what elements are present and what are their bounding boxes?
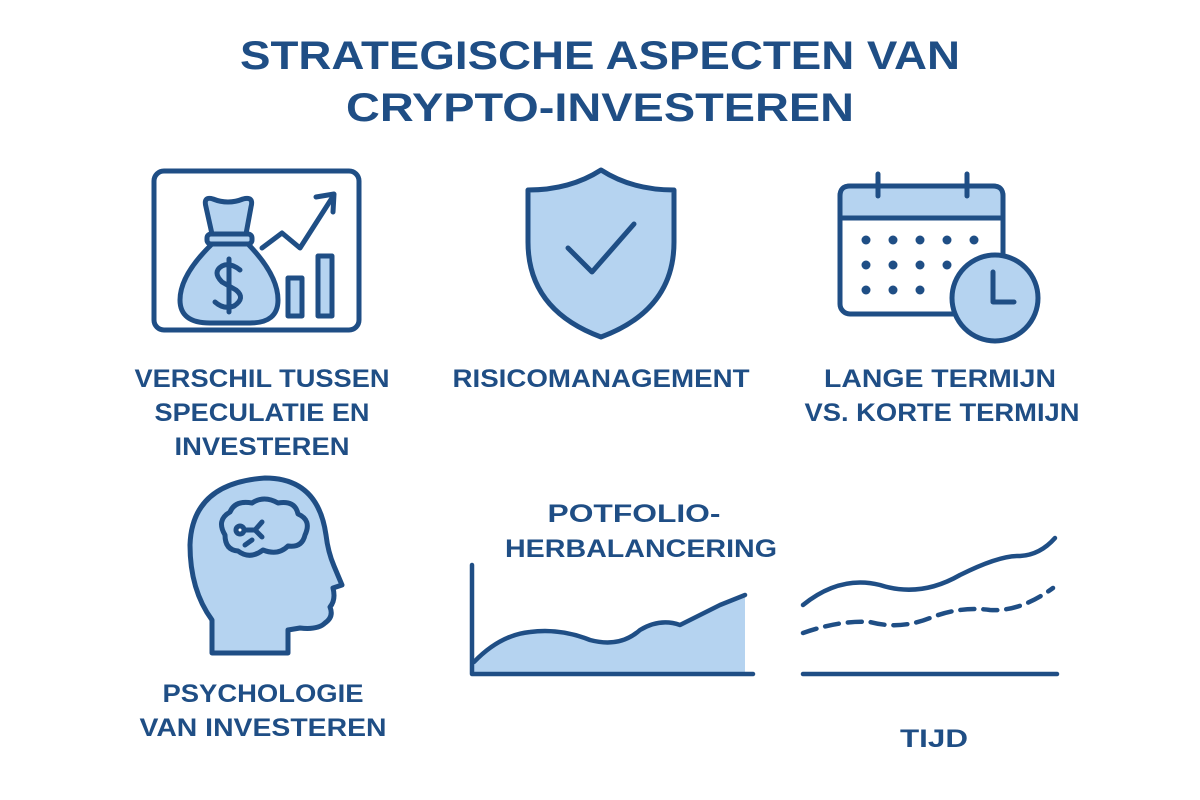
label: verschil bbox=[134, 365, 390, 461]
label: tijd: TIJD bbox=[900, 725, 968, 753]
chart: area bbox=[472, 565, 753, 674]
icon: shield with check bbox=[528, 170, 674, 337]
label: psychologie: VAN INVESTEREN bbox=[140, 714, 386, 742]
label: psychologie: PSYCHOLOGIE bbox=[162, 680, 364, 708]
title bbox=[240, 34, 960, 130]
label: verschil: VERSCHIL TUSSEN bbox=[134, 365, 390, 393]
title: CRYPTO-INVESTEREN bbox=[346, 86, 854, 130]
label: psychologie bbox=[140, 680, 386, 742]
label: portfolio bbox=[505, 500, 777, 563]
label: lange termijn: LANGE TERMIJN bbox=[824, 365, 1056, 393]
icon: money bag with chart bbox=[154, 171, 359, 330]
label: verschil: INVESTEREN bbox=[174, 433, 350, 461]
label: risicomanagement: RISICOMANAGEMENT bbox=[452, 365, 750, 393]
label: verschil: SPECULATIE EN bbox=[154, 399, 370, 427]
label: portfolio: POTFOLIO- bbox=[548, 500, 720, 528]
icon: calendar with clock bbox=[840, 174, 1038, 341]
label: lange termijn bbox=[804, 365, 1080, 427]
title: STRATEGISCHE ASPECTEN VAN bbox=[240, 34, 960, 78]
icon: head with brain bbox=[190, 478, 342, 653]
label: lange termijn: VS. KORTE TERMIJN bbox=[804, 399, 1080, 427]
chart: lines bbox=[803, 538, 1057, 674]
label: portfolio: HERBALANCERING bbox=[505, 535, 777, 563]
